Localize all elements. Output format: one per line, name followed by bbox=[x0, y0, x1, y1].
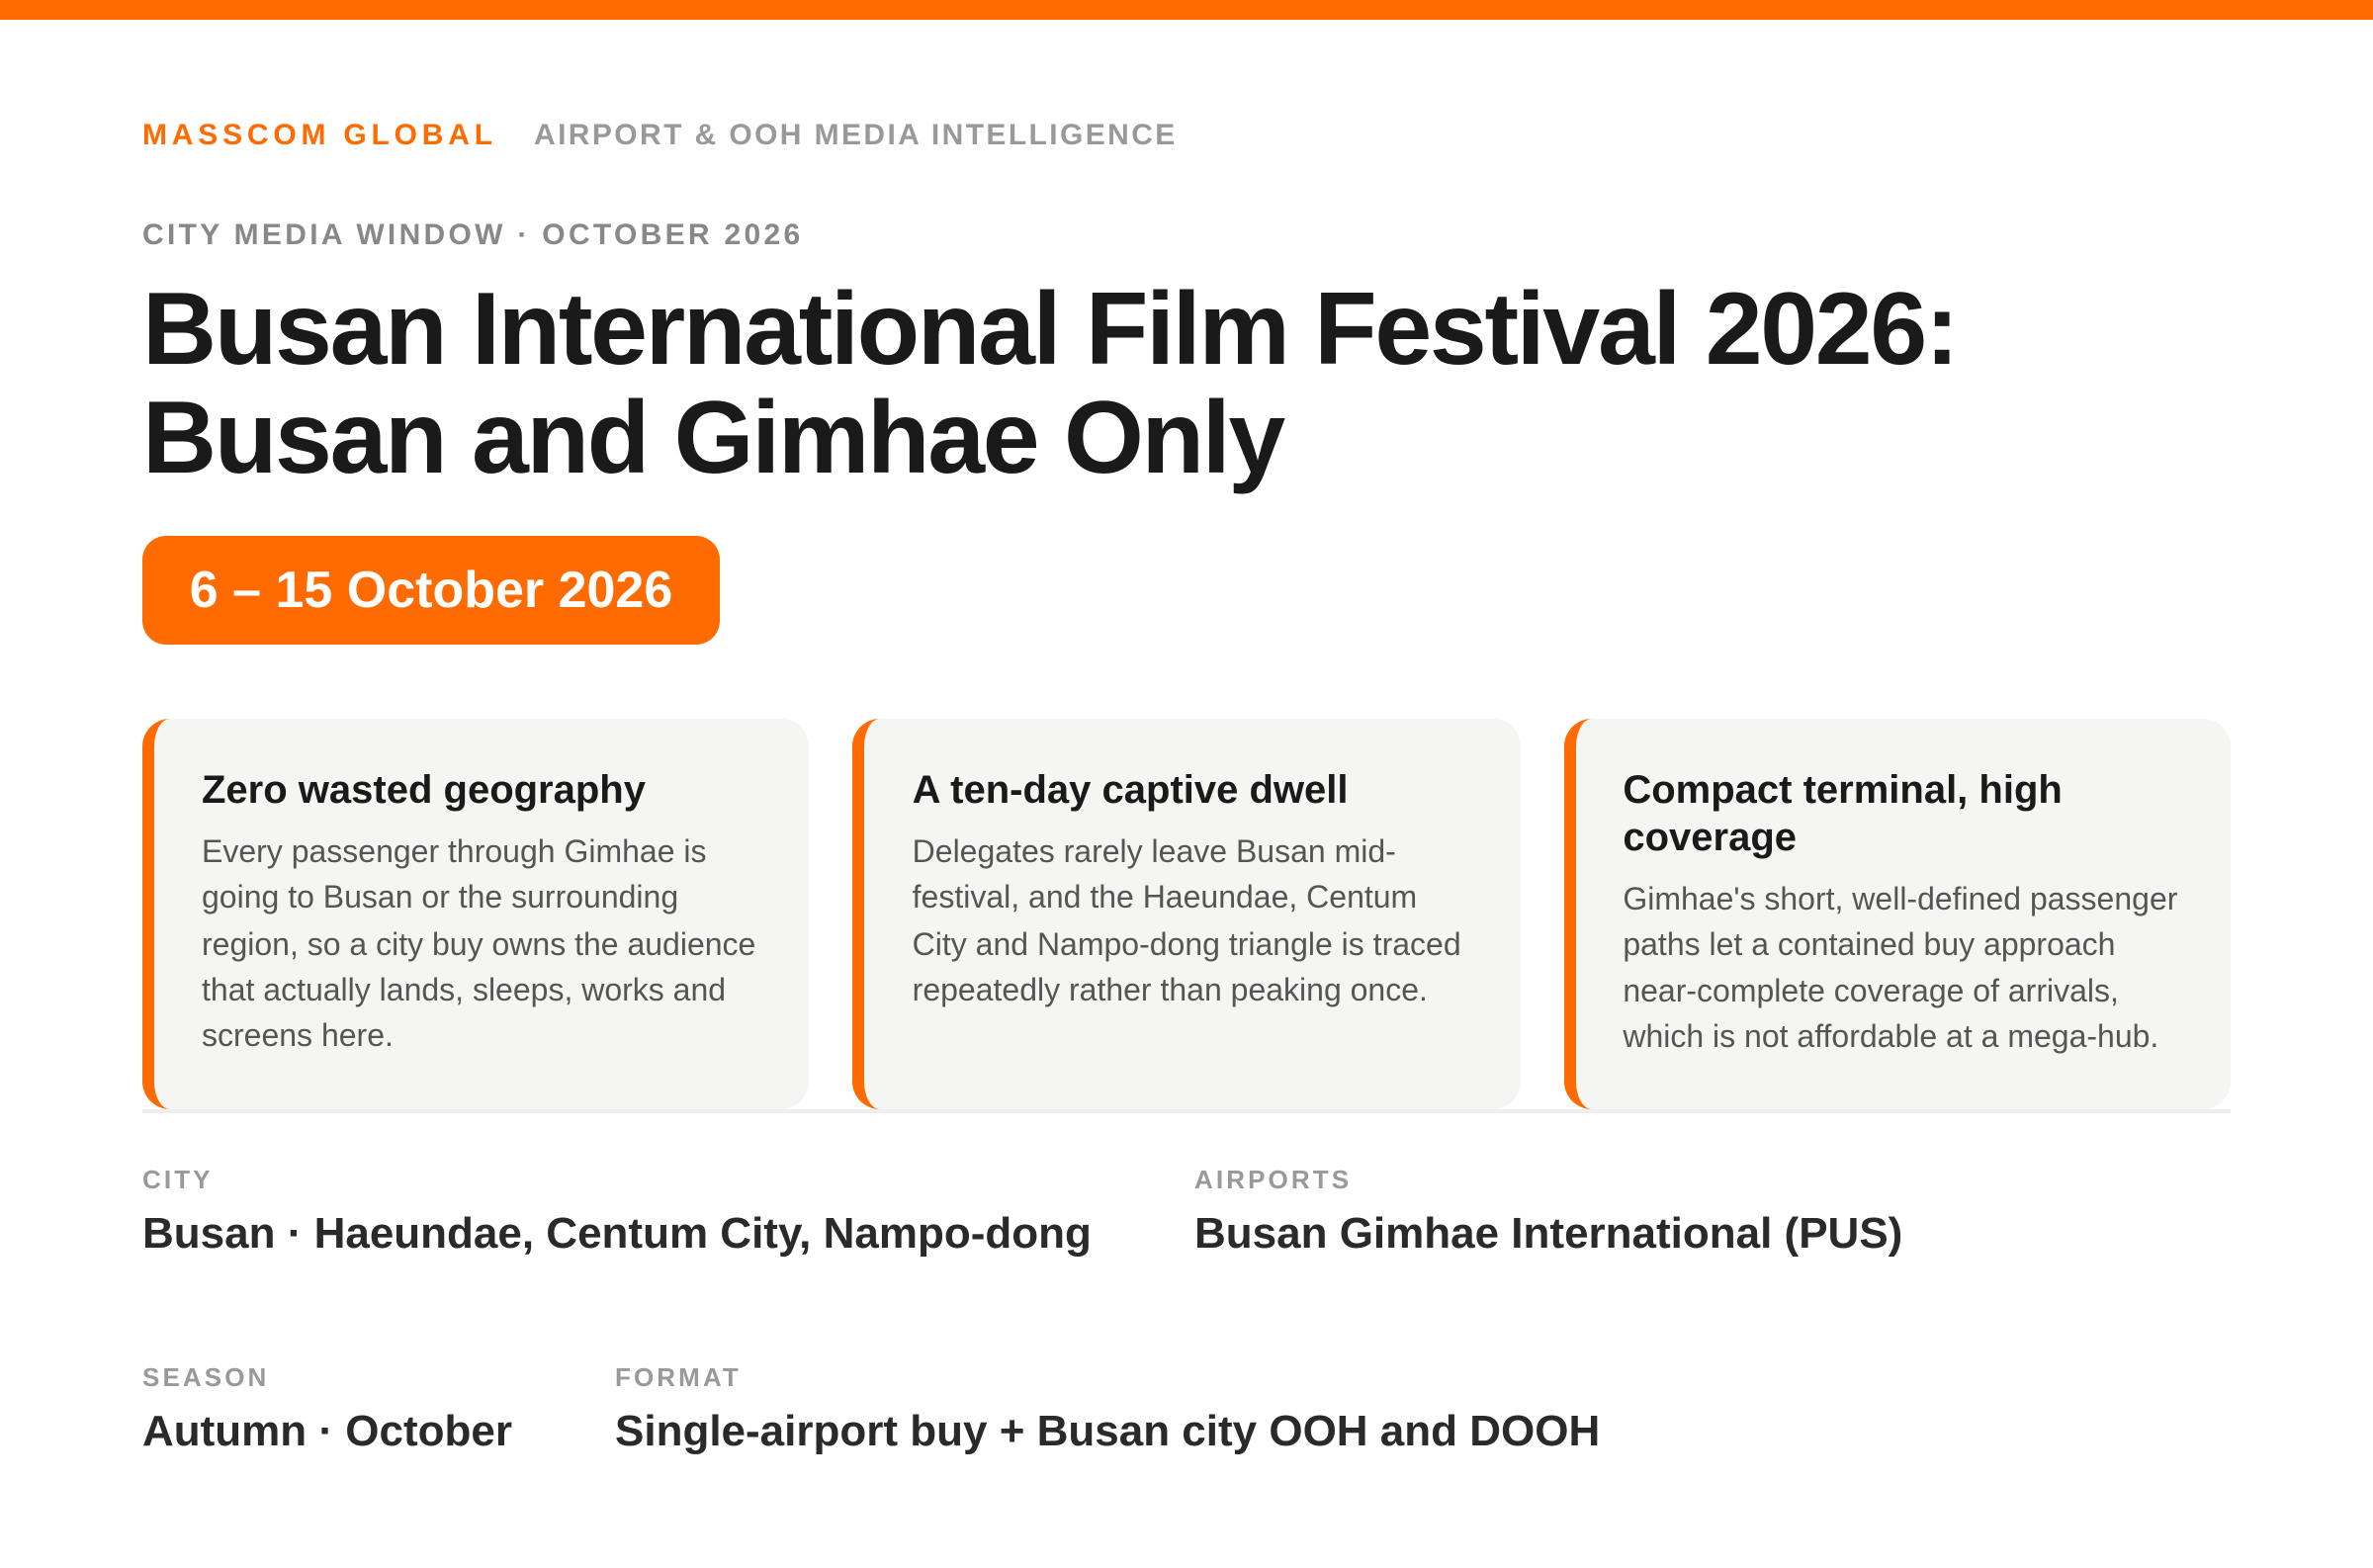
card body: that actually lands, sleeps, works and bbox=[202, 972, 726, 1007]
card body bbox=[913, 833, 1461, 1007]
eyebrow: CITY MEDIA WINDOW · OCTOBER 2026 bbox=[142, 218, 803, 251]
panel: ten-day captive dwell bbox=[852, 719, 1521, 1109]
card body: Gimhae's short, well-defined passenger bbox=[1623, 881, 2177, 916]
date pill bbox=[142, 536, 720, 645]
value: airports: Busan Gimhae International (PUS) bbox=[1194, 1209, 1902, 1258]
label: airports: AIRPORTS bbox=[1194, 1165, 1352, 1194]
card body: City and Nampo-dong triangle is traced bbox=[913, 926, 1461, 962]
card body: near-complete coverage of arrivals, bbox=[1623, 973, 2119, 1008]
card body: repeatedly rather than peaking once. bbox=[913, 972, 1428, 1007]
card heading: coverage bbox=[1623, 816, 1797, 859]
card heading bbox=[1623, 768, 2063, 859]
card body: paths let a contained buy approach bbox=[1623, 926, 2115, 962]
card body: region, so a city buy owns the audience bbox=[202, 926, 755, 962]
card body: screens here. bbox=[202, 1017, 394, 1053]
card heading: Compact terminal, high bbox=[1623, 768, 2063, 812]
card heading: A ten-day captive dwell bbox=[913, 768, 1349, 812]
label: format: FORMAT bbox=[615, 1362, 742, 1392]
label: season: SEASON bbox=[142, 1362, 269, 1392]
panel: compact terminal bbox=[1564, 719, 2231, 1109]
title bbox=[142, 272, 1957, 495]
card body bbox=[202, 833, 755, 1053]
card body: which is not affordable at a mega-hub. bbox=[1623, 1018, 2158, 1054]
brand name: MASSCOM GLOBAL bbox=[142, 119, 497, 151]
brand descriptor: AIRPORT & OOH MEDIA INTELLIGENCE bbox=[534, 119, 1178, 151]
title: Busan and Gimhae Only bbox=[142, 381, 1283, 495]
card body: Every passenger through Gimhae is bbox=[202, 833, 706, 869]
card body: festival, and the Haeundae, Centum bbox=[913, 879, 1417, 915]
value: format: Single-airport buy + Busan city OOH and DOOH bbox=[615, 1407, 1600, 1455]
card body: going to Busan or the surrounding bbox=[202, 879, 678, 915]
divider bbox=[142, 1109, 2231, 1113]
top accent bar bbox=[0, 0, 2373, 20]
card body: Delegates rarely leave Busan mid- bbox=[913, 833, 1396, 869]
value: city: Busan · Haeundae, Centum City, Nampo-dong bbox=[142, 1209, 1092, 1258]
title: Busan International Film Festival 2026: bbox=[142, 272, 1957, 387]
panel: zero wasted geography bbox=[142, 719, 809, 1109]
card body bbox=[1623, 881, 2177, 1054]
label: city: CITY bbox=[142, 1165, 214, 1194]
value: season: Autumn · October bbox=[142, 1407, 512, 1455]
date pill: 6 – 15 October 2026 bbox=[190, 562, 672, 619]
card heading: Zero wasted geography bbox=[202, 768, 646, 812]
